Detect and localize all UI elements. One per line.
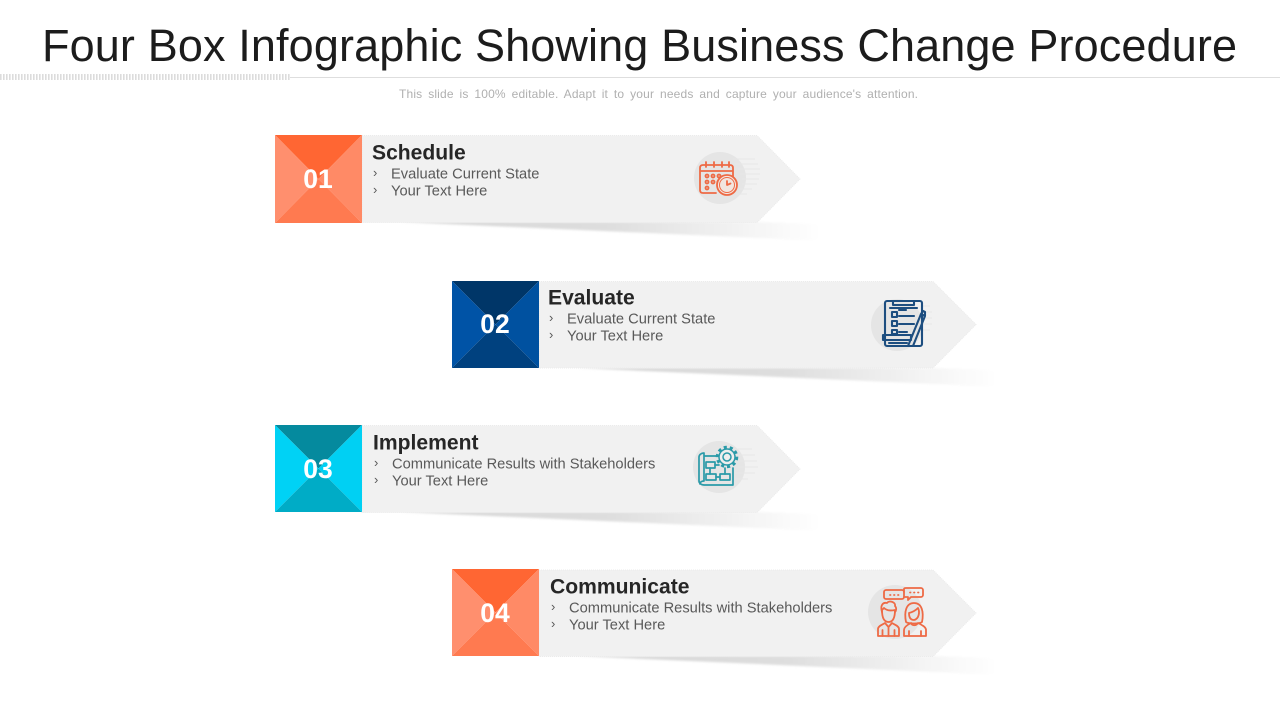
text 1 <box>372 142 539 200</box>
icon: calendar with clock <box>694 152 760 204</box>
text 1: Evaluate Current State <box>391 166 539 182</box>
step 3: implement <box>275 425 822 531</box>
text 4: Communicate Results with Stakeholders <box>569 600 832 616</box>
text 3: › <box>374 472 378 487</box>
text 1: Schedule <box>372 142 466 164</box>
number box 1: 01 <box>303 164 333 194</box>
text 3 <box>373 432 655 490</box>
number box 4 <box>452 569 539 656</box>
text 1: › <box>373 182 377 197</box>
text 4: › <box>551 616 555 631</box>
text 4: Your Text Here <box>569 618 665 634</box>
subtitle: This slide is 100% editable. Adapt it to your needs and capture your audience's attention. <box>399 87 918 101</box>
text 2: › <box>549 310 553 325</box>
text 2: Evaluate <box>548 286 635 310</box>
text 1: › <box>373 165 377 180</box>
text 2: Your Text Here <box>567 328 663 344</box>
text 2 <box>548 286 715 344</box>
text 2: Evaluate Current State <box>567 312 715 328</box>
shadow 2 <box>577 368 998 387</box>
step 4: communicate <box>452 569 998 675</box>
number box 2 <box>452 281 539 368</box>
text 3: Communicate Results with Stakeholders <box>392 456 655 472</box>
icon: two people talking <box>868 585 926 639</box>
text 3: Implement <box>373 432 478 454</box>
arrow panel 3 <box>362 426 800 512</box>
number box 2: 02 <box>480 309 510 339</box>
step 2: evaluate <box>452 281 998 387</box>
shadow 4 <box>577 656 998 675</box>
text 3: Your Text Here <box>392 474 488 490</box>
shadow 1 <box>400 222 822 241</box>
step 1: schedule <box>275 135 822 241</box>
text 4: Communicate <box>550 576 690 598</box>
text 4: › <box>551 599 555 614</box>
text 1: Your Text Here <box>391 184 487 200</box>
text 3: › <box>374 455 378 470</box>
text 2: › <box>549 327 553 342</box>
icon: blueprint and gear <box>693 441 758 493</box>
shadow 3 <box>400 512 822 531</box>
number box 3: 03 <box>303 454 333 484</box>
number box 1 <box>275 135 362 223</box>
number box 4: 04 <box>480 598 510 628</box>
arrow panel 4 <box>539 570 976 656</box>
title: Four Box Infographic Showing Business Change Procedure <box>42 20 1237 71</box>
text 4 <box>550 576 832 634</box>
arrow panel 2 <box>539 282 976 368</box>
number box 3 <box>275 425 362 512</box>
header rule <box>0 74 1280 80</box>
icon: clipboard checklist <box>871 299 932 351</box>
arrow panel 1 <box>362 136 800 222</box>
